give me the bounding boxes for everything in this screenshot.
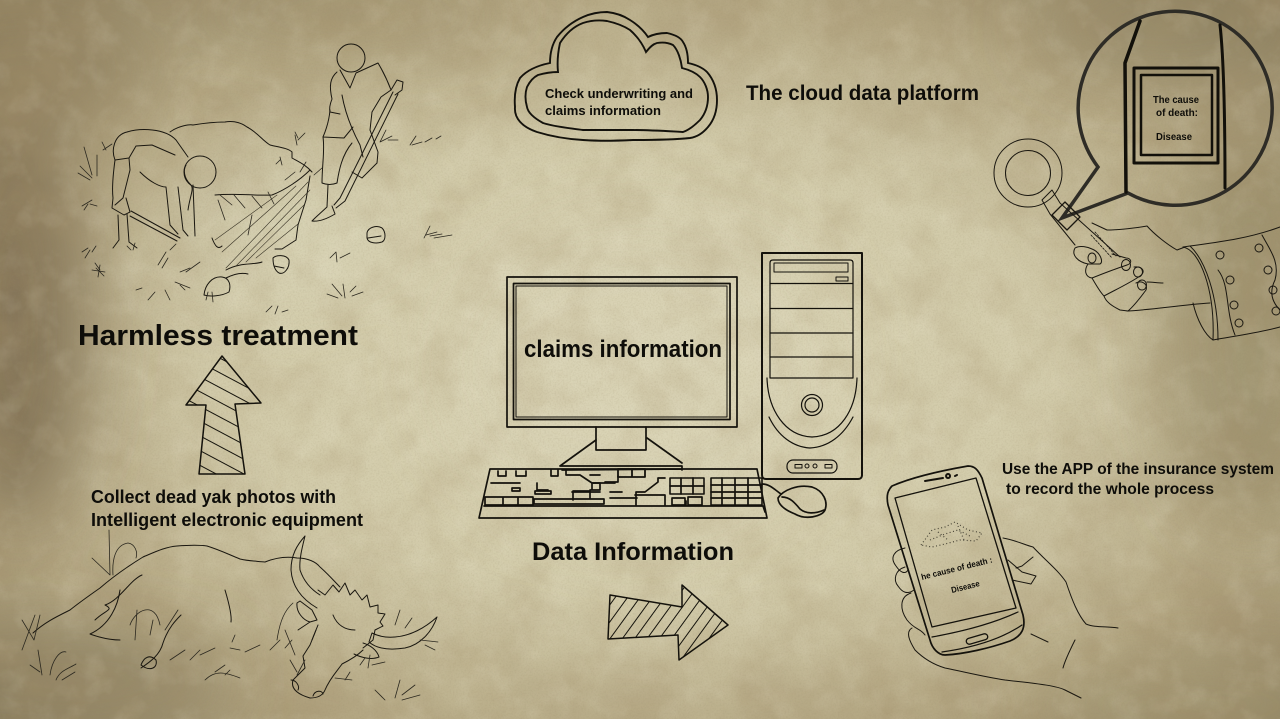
grass tufts: [78, 130, 452, 314]
text: use the app: [1002, 461, 1274, 498]
illustration: computer: [479, 253, 862, 518]
yak head and mane: [291, 583, 385, 698]
magnifier callout: [1062, 11, 1272, 218]
text: collect yak photos: [91, 487, 363, 530]
text: collect yak photos: Collect dead yak photos with: [91, 487, 336, 507]
phone screen text: [920, 555, 993, 595]
yak left horn: [291, 536, 320, 608]
bubble text: [1153, 95, 1199, 143]
bubble text: of death:: [1156, 108, 1198, 119]
illustration: dead yak: [22, 530, 438, 700]
monitor: [507, 277, 737, 427]
cloud outline: [515, 12, 717, 141]
arrow: up: [186, 356, 261, 474]
phone body: [887, 466, 1024, 655]
text: use the app: Use the APP of the insurance system: [1002, 461, 1274, 478]
cloud text: [545, 86, 693, 118]
phone screen text: he cause of death :: [920, 555, 993, 582]
heading: cloud data platform: The cloud data platform: [746, 82, 979, 105]
text: collect yak photos: Intelligent electronic equipment: [91, 510, 363, 530]
hand holding phone: [893, 538, 1118, 698]
illustration: hand with magnifier: [994, 139, 1280, 340]
standing man digging: [312, 44, 403, 221]
bubble text: The cause: [1153, 95, 1199, 106]
cloud text: claims information: [545, 103, 661, 118]
illustration: men burying the yak: [78, 44, 452, 314]
device in bubble: [1125, 21, 1225, 192]
burial pit with hatching: [212, 170, 310, 270]
heading: harmless treatment: Harmless treatment: [78, 320, 358, 352]
keyboard: [479, 469, 767, 518]
stones: [204, 227, 385, 296]
arrow: right: [608, 585, 728, 660]
phone photo: [921, 522, 982, 547]
cloud inner band: [526, 20, 708, 132]
yak right horn: [369, 617, 437, 649]
magnifier ring and handle: [994, 139, 1120, 258]
hand: [1074, 223, 1210, 311]
yak ears: [297, 601, 379, 658]
screen text: claims information: [524, 336, 722, 363]
mound of soil: [170, 121, 312, 172]
illustration: phone in hand: [887, 466, 1118, 698]
text: use the app: to record the whole process: [1006, 481, 1214, 498]
monitor stand: [560, 427, 682, 470]
sleeve: [1183, 227, 1280, 340]
yak grass: [22, 530, 438, 700]
bubble text: Disease: [1156, 132, 1192, 143]
computer tower: [762, 253, 862, 479]
bending man: [112, 130, 216, 248]
heading: data information: Data Information: [532, 538, 734, 566]
cloud text: Check underwriting and: [545, 86, 693, 101]
phone screen text: Disease: [950, 578, 981, 595]
yak body: [33, 545, 340, 669]
callout bubble: [1062, 11, 1272, 218]
mouse and cable: [762, 484, 826, 517]
cloud: check underwriting: [515, 12, 717, 141]
